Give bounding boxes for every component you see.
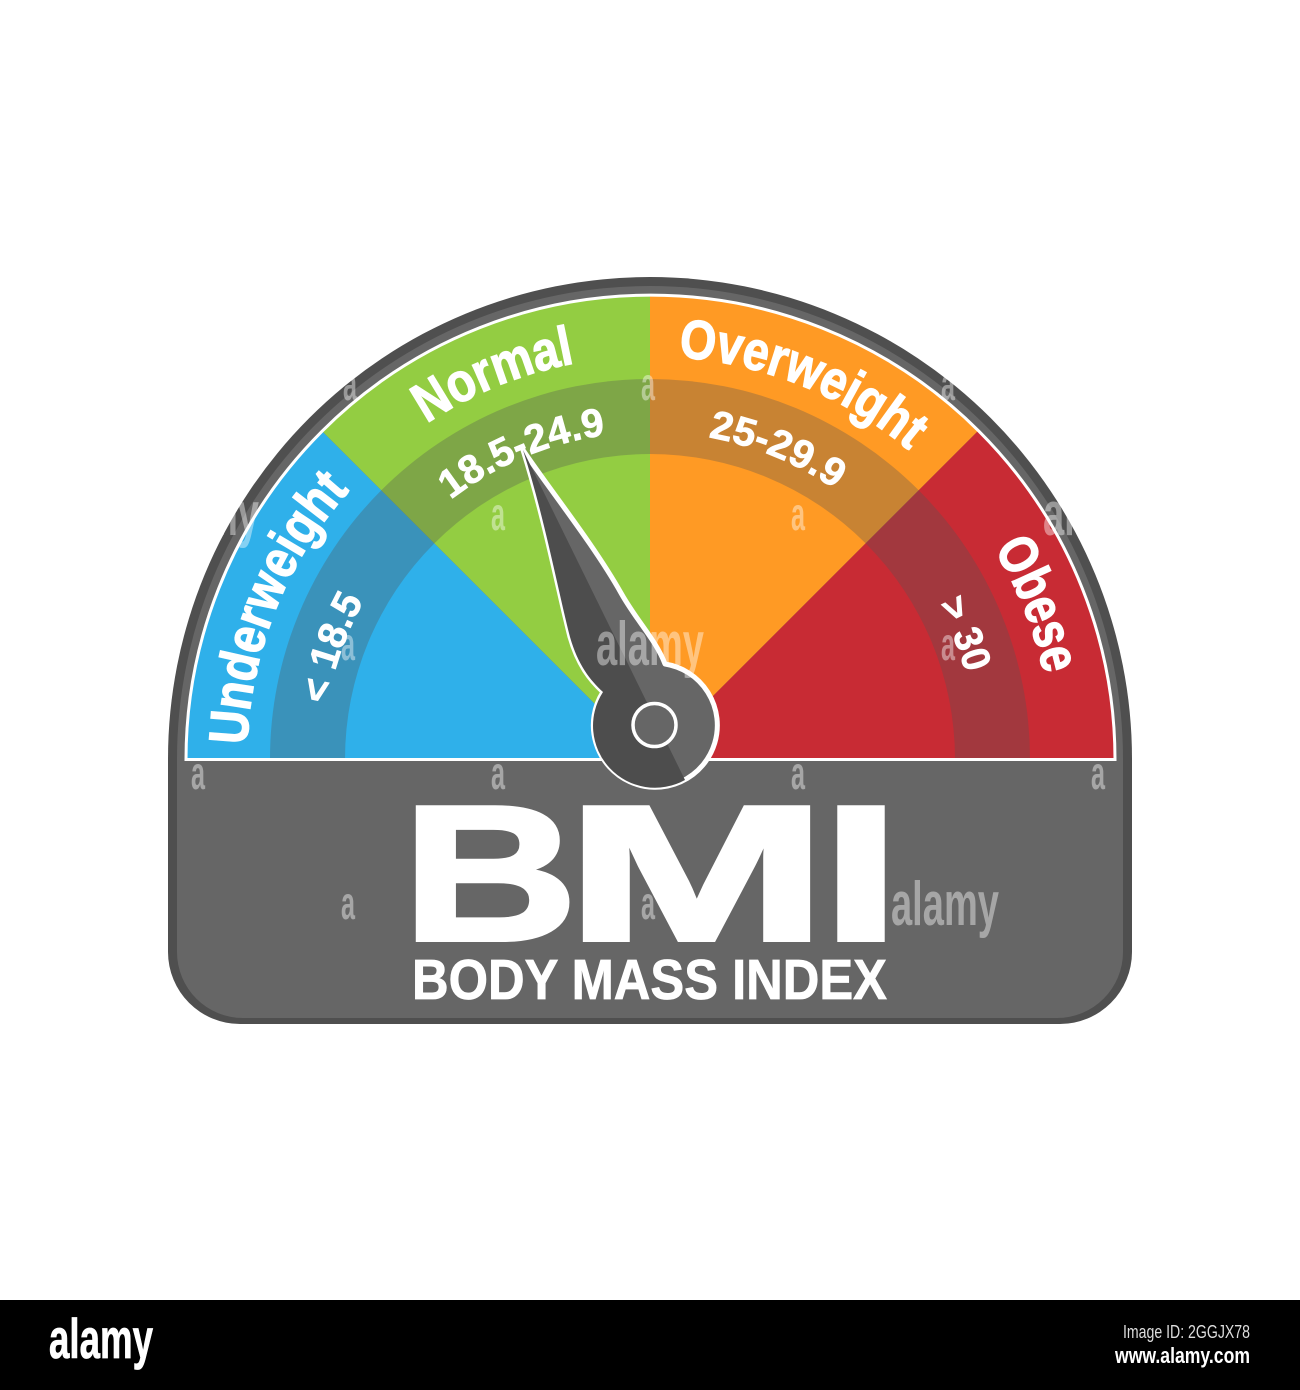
title: BMI: B <box>402 765 578 981</box>
value: 18.5-24.9: 18.5-24.9 <box>438 408 603 499</box>
watermark marks: a <box>491 747 505 799</box>
needle outline <box>523 450 717 787</box>
gauge needle <box>523 450 717 788</box>
sector outline <box>186 295 1115 760</box>
label: Underweight: Underweight <box>208 470 350 742</box>
title: BMI: M <box>565 765 828 981</box>
subtitle: Body Mass Index: BODY MASS INDEX <box>412 948 887 1012</box>
label: Normal: Normal <box>408 324 572 423</box>
value: 25-29.9: 25-29.9 <box>709 411 846 486</box>
needle pivot <box>633 704 676 746</box>
watermark marks: a <box>343 358 357 410</box>
watermark marks: a <box>641 358 655 410</box>
footer bar <box>0 1300 1300 1390</box>
gauge body <box>168 277 1132 1024</box>
sector: normal <box>323 296 650 704</box>
value band <box>270 379 1030 759</box>
watermark marks: alamy <box>1043 480 1151 549</box>
watermark marks <box>151 358 1151 939</box>
watermark marks: a <box>341 618 355 670</box>
watermark marks: a <box>791 488 805 540</box>
watermark marks: a <box>341 877 355 929</box>
watermark marks: alamy <box>596 610 704 679</box>
watermark marks: alamy <box>151 480 259 549</box>
sector: obese <box>711 432 1114 758</box>
gauge sectors <box>186 295 1114 759</box>
footer logo: alamy <box>49 1307 153 1370</box>
watermark marks: a <box>941 358 955 410</box>
footer image id: Image ID: 2GGJX78 <box>1123 1322 1250 1342</box>
watermark marks: alamy <box>891 870 999 939</box>
watermark marks: a <box>1091 747 1105 799</box>
watermark marks: a <box>791 747 805 799</box>
label: Obese: Obese <box>999 536 1071 672</box>
title: BMI: I <box>821 765 901 981</box>
value: under 18.5: < 18.5 <box>308 590 361 701</box>
sector: overweight <box>650 296 978 696</box>
sector: underweight <box>188 432 600 758</box>
watermark marks: a <box>641 877 655 929</box>
needle dark half <box>523 450 685 788</box>
watermark marks: a <box>941 618 955 670</box>
watermark marks: a <box>491 488 505 540</box>
value: over 30: > 30 <box>940 594 990 670</box>
footer url: www.alamy.com <box>1114 1343 1250 1368</box>
watermark marks: a <box>191 747 205 799</box>
label: Overweight: Overweight <box>682 320 928 450</box>
